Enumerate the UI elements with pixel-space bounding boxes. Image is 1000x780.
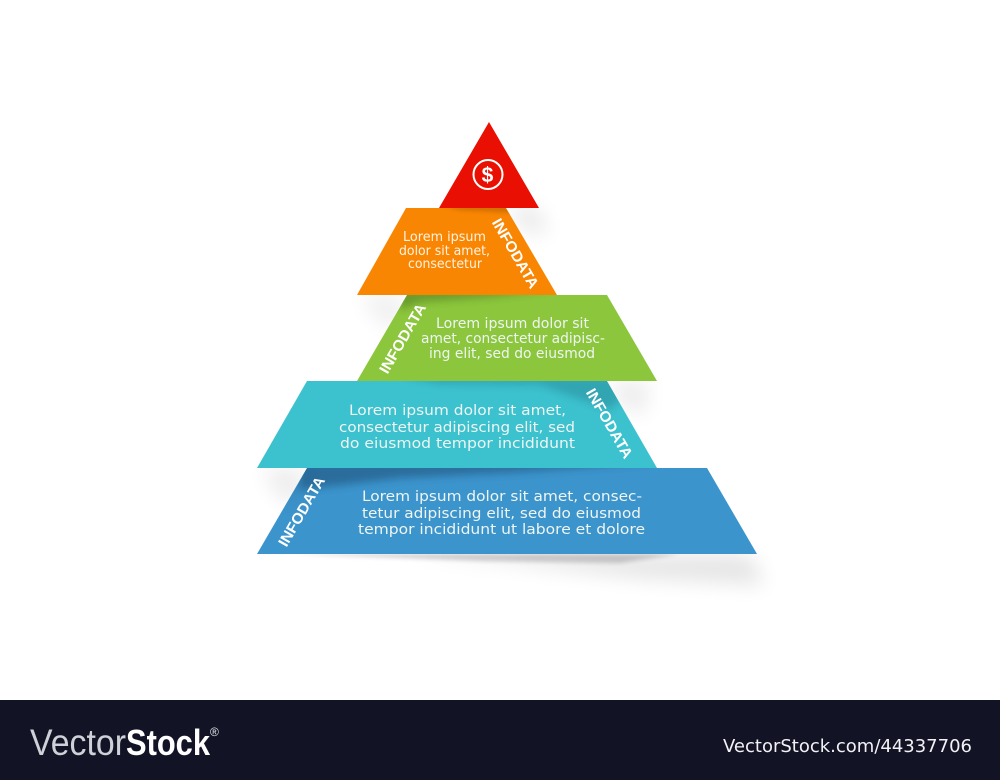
shadow of green tier on white, right bbox=[607, 381, 650, 415]
label: teal INFODATA: INFODATA bbox=[582, 386, 636, 462]
text: green tier copy: amet, consectetur adipisc- bbox=[421, 331, 605, 347]
contact shadow cast by orange tier bbox=[399, 295, 528, 311]
text: green tier copy: Lorem ipsum dolor sit bbox=[436, 316, 589, 332]
text: blue tier copy: tempor incididunt ut labore et dolore bbox=[358, 522, 645, 538]
tier 2: orange bbox=[357, 205, 557, 295]
text: green tier copy: ing elit, sed do eiusmod bbox=[429, 346, 595, 362]
tier 5: blue base bbox=[257, 462, 757, 554]
tier 1: red apex bbox=[439, 122, 539, 208]
text: blue tier copy: tetur adipiscing elit, sed do eiusmod bbox=[362, 506, 641, 522]
shadow under base tier bbox=[290, 554, 765, 585]
text: green tier copy bbox=[421, 316, 605, 362]
text: teal tier copy: do eiusmod tempor incididunt bbox=[340, 436, 575, 452]
logo wordmark: Stock bbox=[126, 722, 211, 763]
shadow of red tier on white, right bbox=[505, 208, 548, 235]
pyramid infographic bbox=[257, 122, 765, 585]
tier 4: teal bbox=[257, 376, 657, 468]
shadow of teal tier on white, left bbox=[262, 468, 307, 505]
footer bar bbox=[0, 700, 1000, 780]
shadow of orange tier on white, left bbox=[360, 295, 407, 330]
text: teal tier copy bbox=[339, 403, 575, 452]
text: teal tier copy: consectetur adipiscing elit, sed bbox=[339, 420, 575, 436]
text: orange tier copy: consectetur bbox=[408, 257, 483, 272]
text: orange tier copy: Lorem ipsum bbox=[403, 230, 486, 245]
logo wordmark: Vector bbox=[30, 722, 126, 763]
label: orange INFODATA: INFODATA bbox=[488, 216, 542, 292]
text: orange tier copy: dolor sit amet, bbox=[399, 244, 490, 259]
text: teal tier copy: Lorem ipsum dolor sit amet, bbox=[349, 403, 566, 419]
image id: VectorStock.com/44337706 bbox=[723, 736, 972, 757]
label: blue INFODATA: INFODATA bbox=[275, 474, 329, 550]
text: orange tier copy bbox=[399, 230, 490, 272]
logo wordmark bbox=[30, 722, 219, 763]
contact shadow cast by red tier bbox=[448, 208, 510, 214]
icon: dollar coin: $ bbox=[482, 164, 494, 187]
logo wordmark: ® bbox=[210, 725, 219, 739]
text: blue tier copy bbox=[358, 489, 645, 538]
tier 3: green bbox=[357, 290, 657, 381]
contact shadow cast by teal tier bbox=[296, 468, 615, 492]
contact shadow cast by green tier bbox=[420, 381, 620, 410]
text: blue tier copy: Lorem ipsum dolor sit amet, consec- bbox=[362, 489, 642, 505]
label: green INFODATA: INFODATA bbox=[376, 301, 430, 377]
